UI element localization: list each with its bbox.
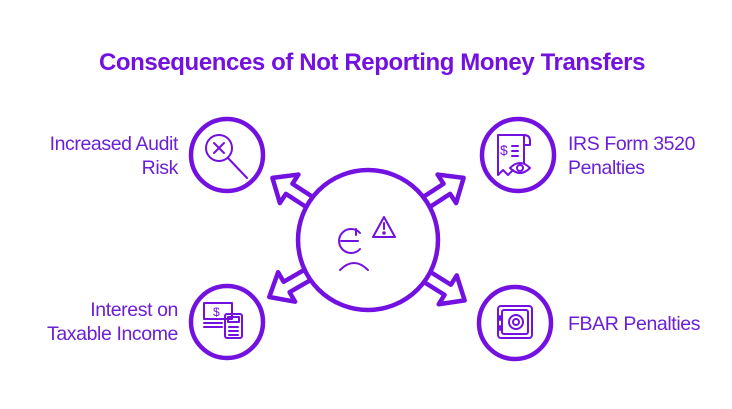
label: audit risk (50, 133, 178, 179)
icon circle: IRS form (482, 119, 554, 191)
label: interest (47, 299, 178, 345)
label: IRS form (568, 133, 695, 179)
label: IRS form: IRS Form 3520 (568, 133, 695, 155)
icon circle: interest: $ (213, 305, 220, 319)
central hub with arrows (261, 164, 474, 315)
icon circle: interest (191, 286, 263, 358)
label: audit risk: Increased Audit (50, 133, 178, 155)
icon: person with euro and warning (339, 217, 395, 270)
icon circle: IRS form: $ (500, 142, 508, 158)
icon circle: audit (191, 119, 263, 191)
label: interest: Taxable Income (47, 323, 178, 345)
label: audit risk: Risk (142, 157, 178, 179)
label: interest: Interest on (90, 299, 178, 321)
label: IRS form: Penalties (568, 157, 645, 179)
icon circle: FBAR safe (479, 287, 551, 359)
label: FBAR: FBAR Penalties (568, 313, 700, 335)
title: Consequences of Not Reporting Money Transfers (99, 49, 645, 76)
